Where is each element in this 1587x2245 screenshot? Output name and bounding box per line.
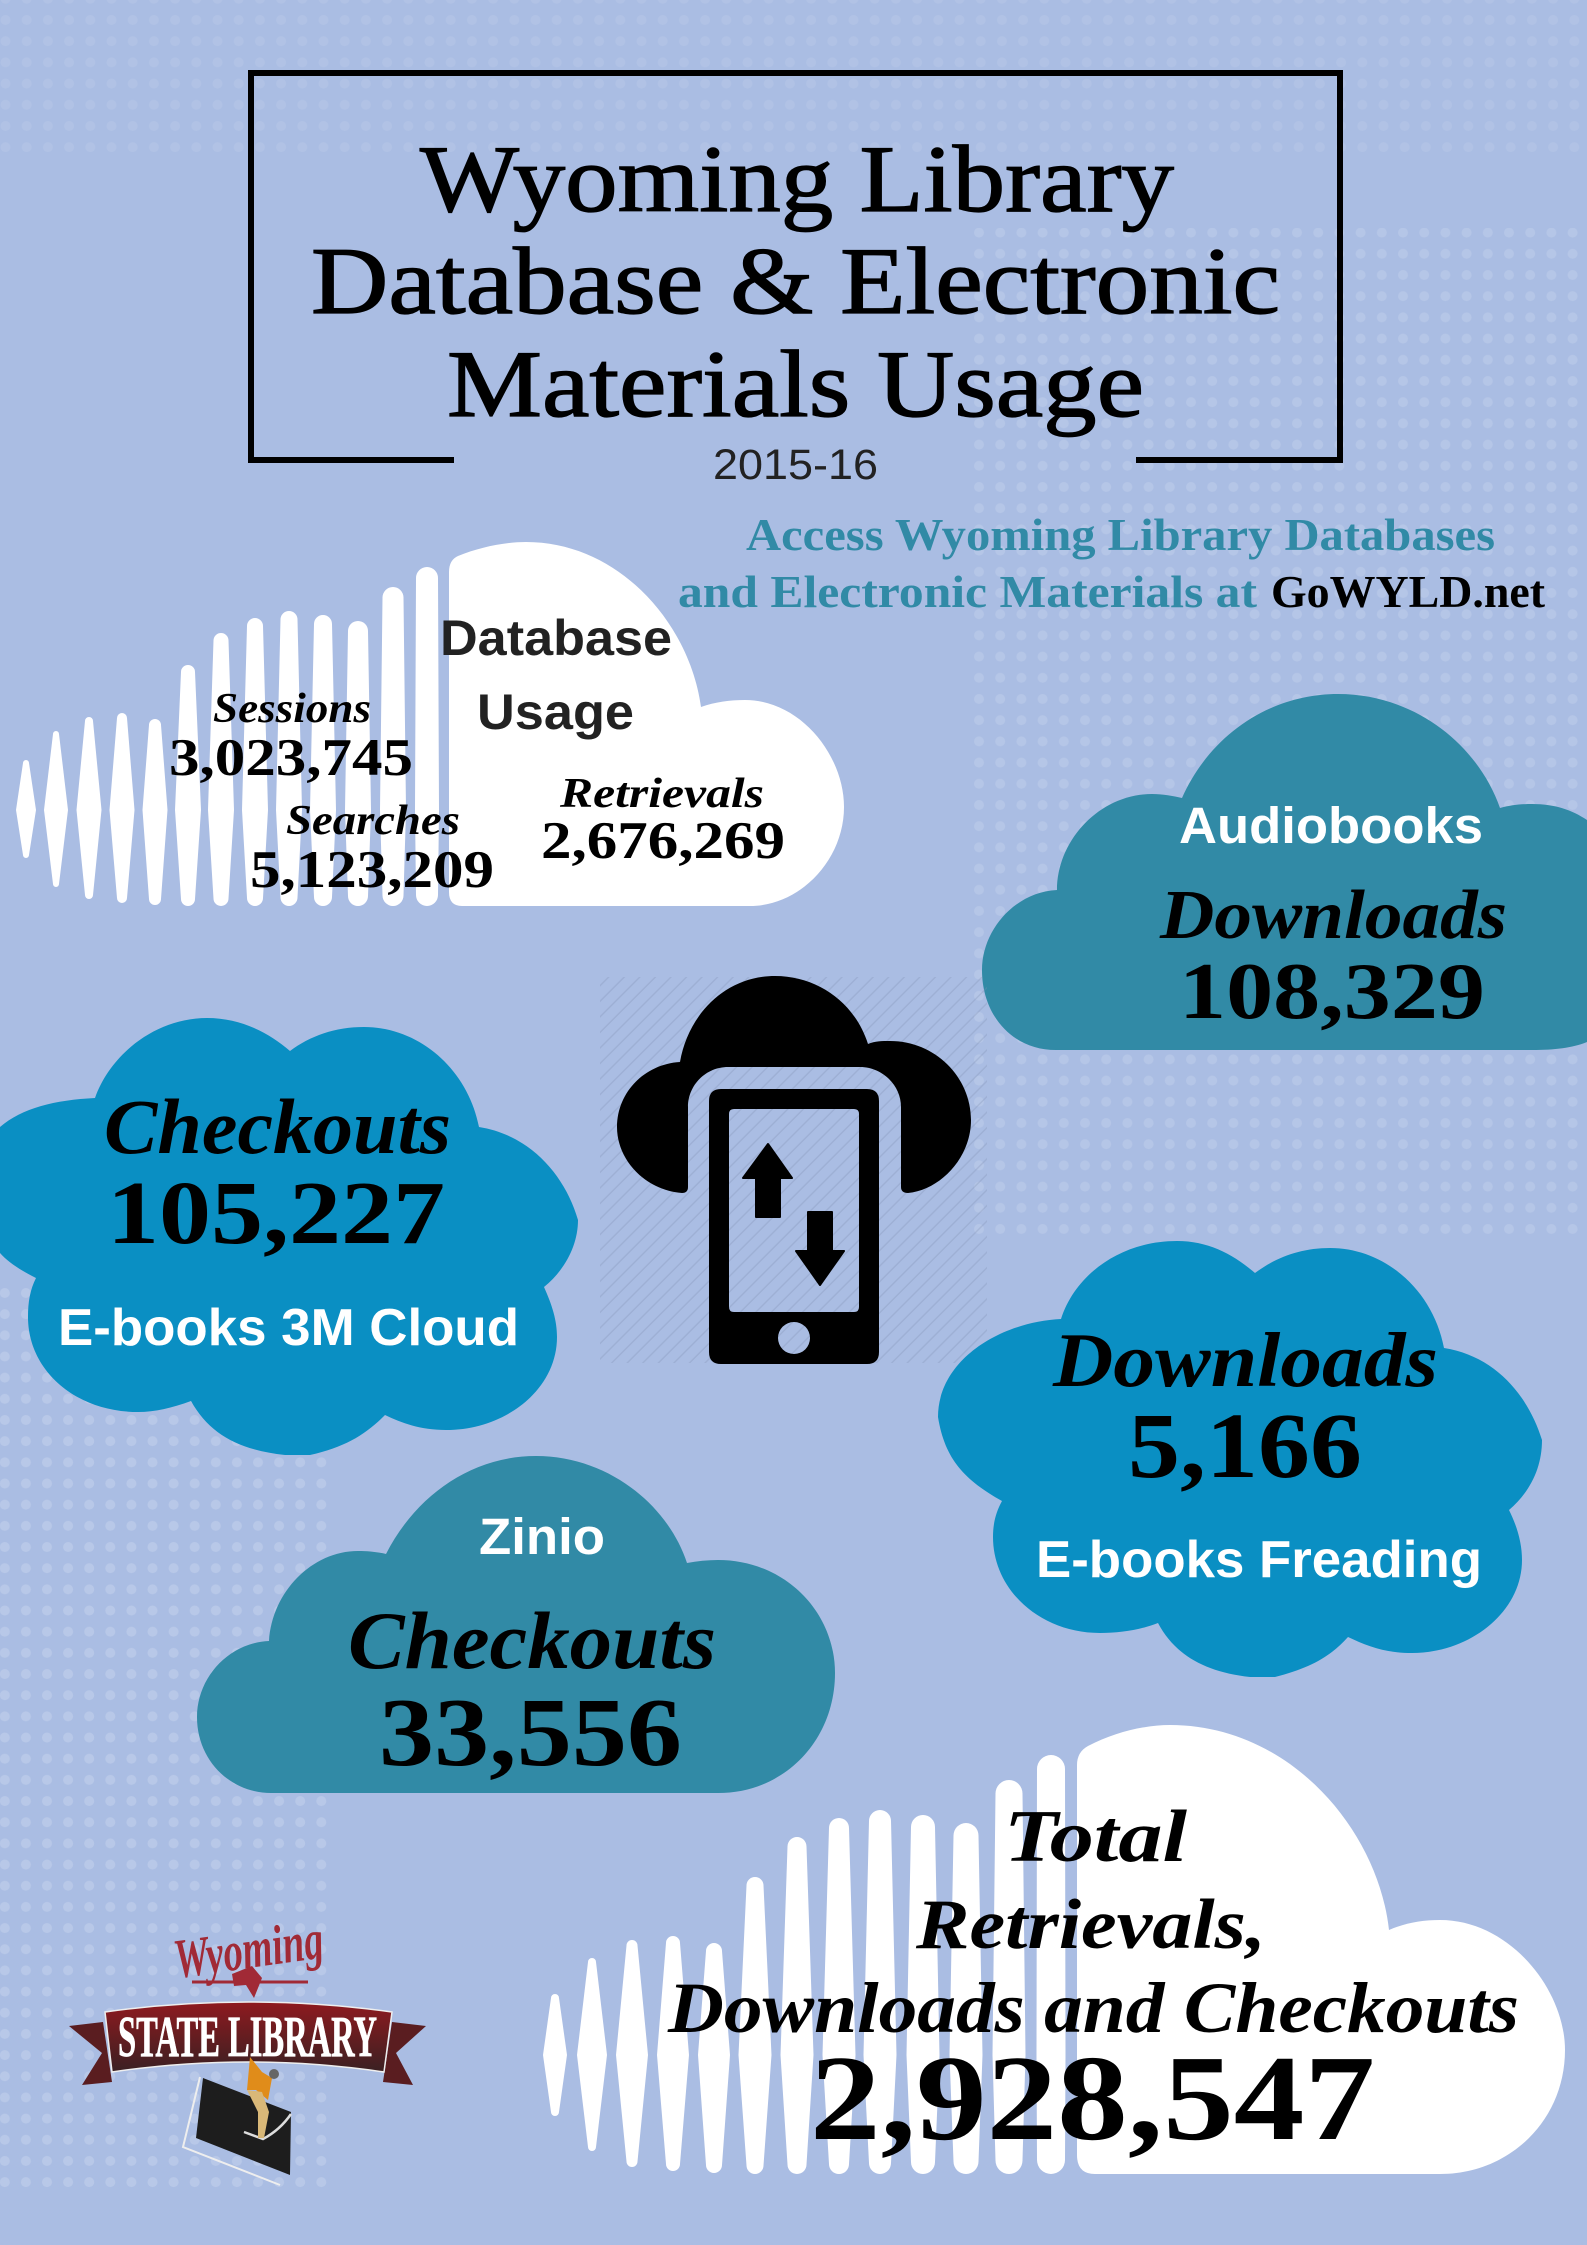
panel: Zinio: Zinio — [479, 1508, 605, 1565]
stat: retrievals — [541, 771, 785, 870]
panel: audiobooks cloud: Downloads — [1159, 877, 1507, 954]
heading: database usage — [440, 610, 672, 740]
panel: e-books Freading: E-books Freading — [1036, 1531, 1482, 1589]
title: Wyoming Library — [420, 126, 1175, 232]
panel: e-books 3M Cloud: E-books 3M Cloud — [58, 1299, 519, 1357]
panel: e-books 3M Cloud — [0, 1018, 578, 1455]
stat: searches: Searches — [286, 798, 460, 844]
heading: total retrievals, downloads and checkouts: Downloads and Checkouts — [667, 1968, 1519, 2048]
stat: retrievals: Retrievals — [559, 771, 764, 817]
panel: Zinio: 33,556 — [379, 1679, 682, 1786]
heading: database usage: Database — [440, 610, 672, 666]
stat: sessions — [169, 686, 413, 787]
heading: total retrievals, downloads and checkouts: Total — [1004, 1796, 1188, 1878]
panel: audiobooks cloud — [982, 694, 1587, 1050]
panel: database usage cloud — [16, 542, 844, 906]
panel: e-books 3M Cloud: Checkouts — [104, 1083, 451, 1170]
logo banner: STATE LIBRARY — [118, 2004, 377, 2069]
title frame — [251, 73, 1340, 460]
white waveform cloud — [16, 542, 844, 906]
access callout: GoWYLD.net — [1271, 566, 1546, 617]
panel: audiobooks cloud: Audiobooks — [1179, 797, 1483, 854]
stat: retrievals: 2,676,269 — [541, 812, 785, 870]
logo book and climber — [183, 2057, 291, 2185]
panel: Zinio — [197, 1456, 835, 1793]
stat: sessions: Sessions — [213, 686, 371, 732]
panel: e-books Freading: Downloads — [1052, 1317, 1438, 1403]
logo script: Wyoming — [170, 1909, 327, 1998]
icon: phone syncing with cloud — [600, 976, 987, 1364]
title: Database & Electronic — [311, 228, 1280, 334]
logo banner — [69, 2002, 426, 2085]
panel: Zinio: Checkouts — [348, 1595, 716, 1686]
logo: Wyoming State Library — [69, 1909, 426, 2185]
panel: e-books Freading: 5,166 — [1128, 1395, 1362, 1498]
panel: audiobooks cloud: 108,329 — [1179, 946, 1485, 1036]
title: Materials Usage — [447, 331, 1144, 437]
logo script: Wyoming: Wyoming — [170, 1909, 327, 1991]
year: 2015-16 — [713, 441, 878, 489]
title — [311, 126, 1280, 437]
heading: database usage: Usage — [477, 684, 634, 740]
access callout: Access Wyoming Library Databases — [746, 509, 1495, 560]
panel: total cloud — [543, 1725, 1565, 2174]
access callout: and Electronic Materials at — [678, 566, 1258, 617]
white waveform cloud — [543, 1725, 1565, 2174]
heading: total retrievals, downloads and checkouts — [667, 1796, 1519, 2048]
stat: searches — [250, 798, 494, 899]
panel: e-books Freading — [938, 1241, 1542, 1677]
panel: e-books 3M Cloud: 105,227 — [107, 1164, 445, 1263]
stat: sessions: 3,023,745 — [169, 729, 413, 787]
access callout — [678, 509, 1546, 617]
total number: 2,928,547 — [810, 2031, 1375, 2166]
heading: total retrievals, downloads and checkouts: Retrievals, — [915, 1886, 1266, 1964]
stat: searches: 5,123,209 — [250, 841, 494, 899]
